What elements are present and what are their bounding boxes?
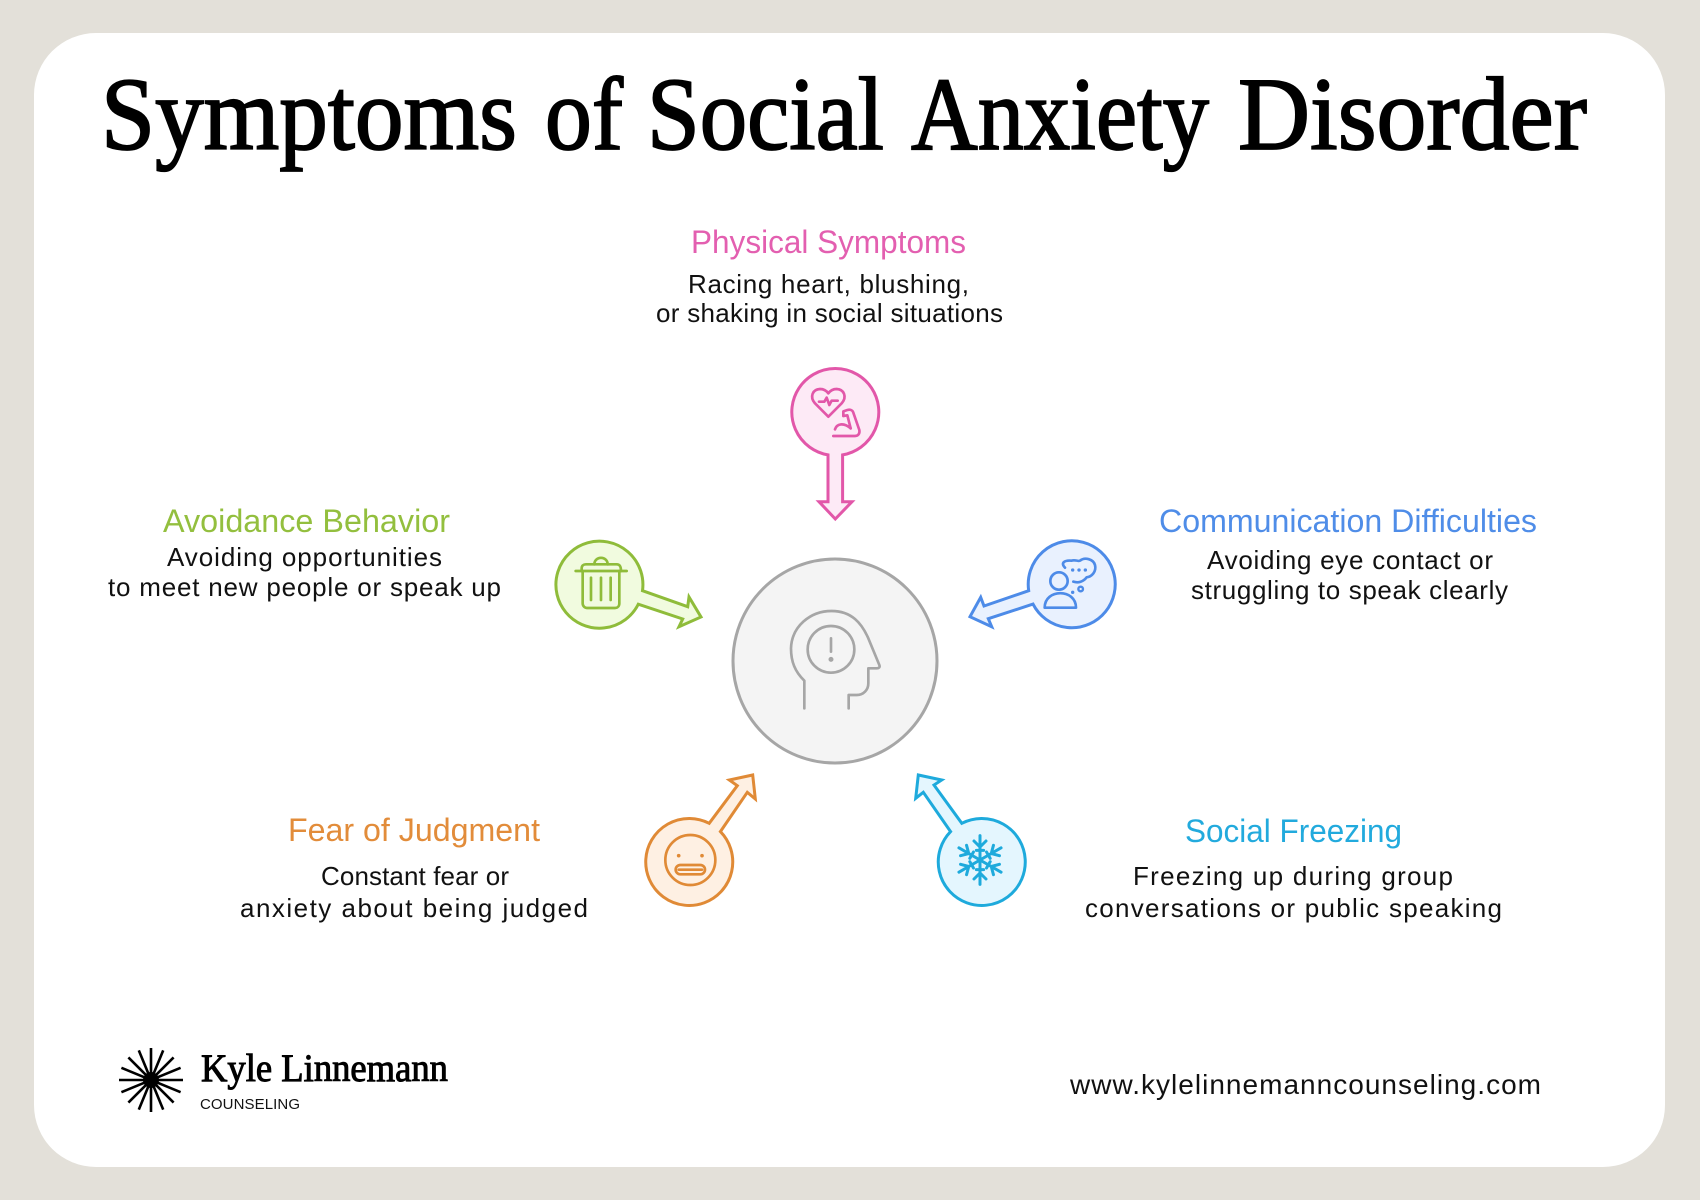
panel: avoidance behavior text [108,503,501,602]
node: fear of judgment pin arrow [646,775,755,905]
description: social freezing: Freezing up during group [1133,861,1453,891]
heading: fear of judgment: Fear of Judgment [288,812,540,848]
description: fear of judgment [240,861,588,923]
description: physical symptoms: or shaking in social situations [656,298,1003,328]
description: avoidance behavior: Avoiding opportunities [167,542,442,572]
panel: fear of judgment text [240,812,588,923]
heading: avoidance behavior: Avoidance Behavior [163,503,450,539]
node: avoidance behavior pin arrow [556,541,701,628]
heading: communication difficulties: Communication Difficulties [1159,503,1537,539]
description: fear of judgment: anxiety about being judged [240,893,588,923]
logo subtitle: COUNSELING [200,1096,300,1113]
title: Symptoms [101,57,517,172]
icon: grimacing face [665,835,715,885]
description: communication difficulties: struggling to speak clearly [1191,575,1508,605]
description: avoidance behavior [108,542,501,602]
description: social freezing: conversations or public speaking [1085,893,1502,923]
description: physical symptoms: Racing heart, blushing, [688,269,969,299]
description: communication difficulties [1191,545,1508,605]
description: fear of judgment: Constant fear or [321,861,509,891]
icon: snowflake [956,836,1004,884]
icon: head with exclamation [791,611,880,708]
title: Anxiety [911,57,1209,172]
icon: heart and muscle [812,389,859,436]
icon: person with speech cloud [1045,559,1095,608]
description: communication difficulties: Avoiding eye contact or [1207,545,1493,575]
node: social freezing pin arrow [916,775,1025,905]
title: of [545,57,623,172]
description: avoidance behavior: to meet new people or speak up [108,572,501,602]
title: Disorder [1238,57,1587,172]
description: physical symptoms [656,269,1003,328]
panel: communication difficulties text [1159,503,1537,605]
logo: Kyle Linnemann Counseling [119,1047,448,1113]
heading: social freezing: Social Freezing [1185,813,1402,849]
title [101,57,1587,172]
node: communication difficulties pin arrow [970,541,1115,628]
logo name: Kyle Linnemann [201,1047,448,1090]
title: Social [647,57,884,172]
heading: physical symptoms: Physical Symptoms [691,224,966,260]
central circle with head icon [733,559,937,763]
icon: trash can [576,558,627,608]
website url: www.kylelinnemanncounseling.com [1069,1069,1541,1100]
panel: physical symptoms text [656,224,1003,328]
description: social freezing [1085,861,1502,923]
icon: sunburst [119,1048,183,1112]
node: physical symptoms pin arrow [792,369,879,519]
panel: social freezing text [1085,813,1502,923]
